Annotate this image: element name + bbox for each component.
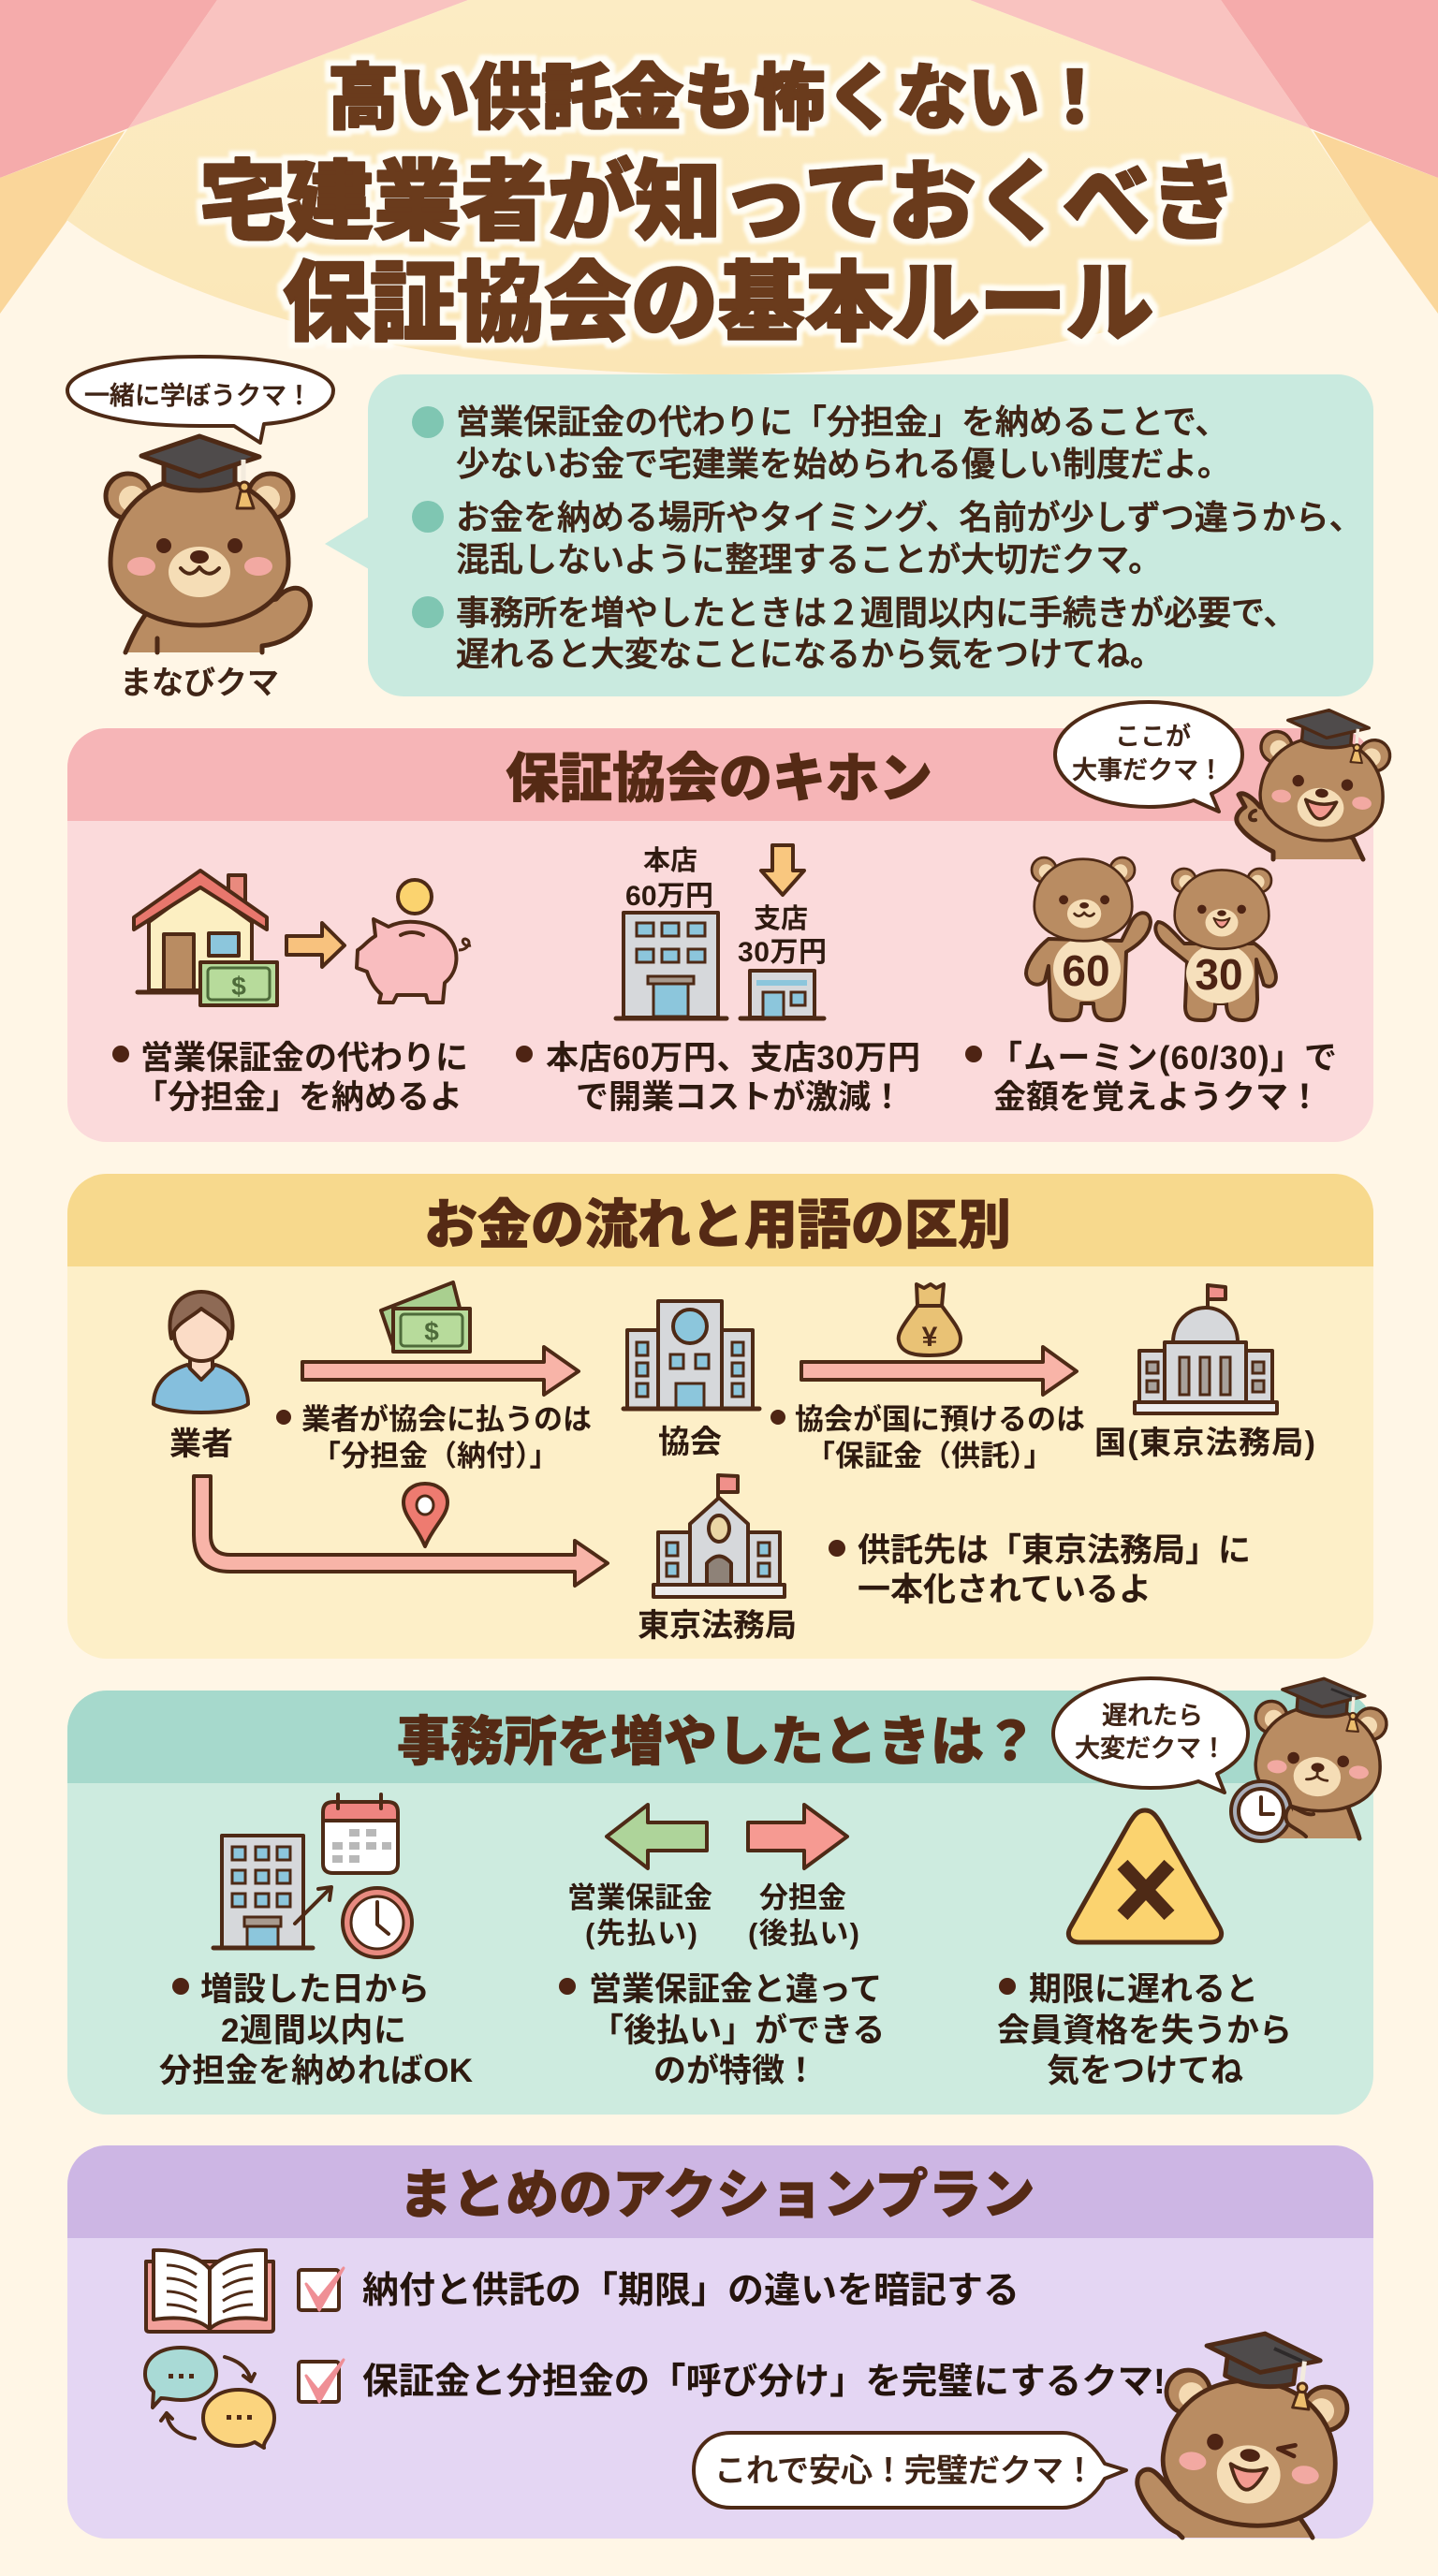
mascot: bear with clock [1231, 1674, 1389, 1841]
check item 2: 保証金と分担金の「呼び分け」を完璧にするクマ! [362, 2362, 1166, 2402]
icon: warning triangle [1068, 1810, 1222, 1942]
speech bubble: 一緒に学ぼうクマ: 一緒に学ぼうクマ！ [84, 382, 312, 410]
panel: 事務所を増やしたときは？ [67, 1690, 1373, 2115]
caption: 保証金 [770, 1403, 1085, 1472]
caption: 分担金 [276, 1403, 592, 1472]
caption 1: 増設した日から [200, 1971, 430, 2008]
mascot: pointing bear [1237, 705, 1393, 859]
arrow: operator to association [302, 1347, 579, 1395]
icon: building, calendar and clock [213, 1794, 412, 1957]
arrow: association to state [801, 1347, 1077, 1395]
panel: まとめのアクションプラン [67, 2145, 1373, 2539]
caption 2: 営業保証金と違って [589, 1971, 882, 2008]
icon: location pin [404, 1484, 448, 1546]
caption 3: 気をつけてね [1047, 2053, 1243, 2089]
label: 本店: 本店 [643, 845, 697, 876]
arrow labels: 営業保証金 [567, 1881, 712, 1914]
icon: main store and branch [616, 845, 827, 1018]
speech bubble: これで安心 [694, 2433, 1126, 2508]
icon: left and right arrows [607, 1805, 847, 1868]
icon: cash [381, 1282, 470, 1352]
icon: bear 60 [1026, 857, 1151, 1020]
panel: お金の流れと用語の区別 [67, 1174, 1373, 1659]
icon: house and money to piggy bank [134, 871, 471, 1005]
icon: cash: $ [424, 1317, 439, 1346]
icon: yen money bag [899, 1284, 961, 1355]
label: 本店: 60万円 [625, 881, 713, 912]
heading: お金の流れと用語の区別 [424, 1195, 1011, 1255]
mascot: まなびクマ [106, 436, 310, 652]
caption 1 [112, 1040, 468, 1116]
speech bubble: 遅れたら大変だクマ [1053, 1678, 1248, 1793]
arrow up [295, 1887, 331, 1924]
speech bubble: ここが大事だクマ: 大事だクマ！ [1072, 756, 1224, 784]
icon: bear 30: 30 [1195, 950, 1243, 999]
caption 2 [516, 1040, 920, 1116]
caption 3: 会員資格を失うから [997, 2012, 1292, 2049]
speech bubble: 遅れたら大変だクマ: 大変だクマ！ [1075, 1734, 1226, 1763]
arrow labels: (先払い) [585, 1917, 697, 1950]
icon: piggy bank [357, 880, 471, 1003]
label: 東京法務局: 東京法務局 [638, 1608, 797, 1644]
panel: intro key points [325, 374, 1373, 696]
icon: yen money bag: ¥ [922, 1322, 938, 1353]
arrow: bent to Tokyo Legal Affairs Bureau [194, 1476, 608, 1586]
mascot name: まなびクマ [120, 666, 279, 701]
icon: association building [624, 1301, 759, 1409]
caption 1: 営業保証金の代わりに [140, 1040, 468, 1076]
intro text: 混乱しないように整理することが大切だクマ。 [456, 540, 1162, 578]
label: 支店: 30万円 [738, 937, 827, 968]
intro text: 遅れると大変なことになるから気をつけてね。 [456, 635, 1164, 673]
heading: 保証協会のキホン [506, 749, 932, 809]
building [213, 1836, 313, 1948]
caption: 分担金: 「分担金（納付）」 [312, 1440, 558, 1472]
heading: 事務所を増やしたときは？ [397, 1712, 1037, 1772]
caption 1 [159, 1971, 473, 2089]
title: 高い供託金も怖くない！ [328, 59, 1110, 139]
mascot: waving bear with cap [1137, 2322, 1355, 2538]
background: top fan decoration [0, 0, 1438, 374]
arrow labels [567, 1881, 859, 1950]
icon: bear 30 [1155, 869, 1276, 1020]
check item 1: 納付と供託の「期限」の違いを暗記する [362, 2271, 1020, 2311]
caption 1: 2週間以内に [221, 2012, 406, 2049]
speech bubble: 遅れたら大変だクマ: 遅れたら [1102, 1702, 1203, 1730]
intro text [456, 402, 1363, 673]
speech bubble: これで安心: これで安心！完璧だクマ！ [714, 2453, 1095, 2489]
speech bubble: ここが大事だクマ [1055, 702, 1242, 812]
icon: Tokyo Legal Affairs Bureau building [653, 1475, 785, 1597]
heading: まとめのアクションプラン [399, 2165, 1034, 2225]
arrow down [761, 845, 804, 895]
title [199, 59, 1237, 352]
caption 2: 「後払い」ができる [591, 2012, 885, 2049]
label: 支店: 支店 [754, 903, 808, 934]
panel: 保証協会のキホン [67, 728, 1373, 1142]
clock [343, 1888, 412, 1957]
icon: operator person [154, 1292, 248, 1412]
caption: deposit destination: 一本化されているよ [858, 1572, 1152, 1608]
caption: deposit destination: 供託先は「東京法務局」に [858, 1532, 1251, 1569]
intro text: お金を納める場所やタイミング、名前が少しずつ違うから、 [456, 498, 1363, 536]
speech bubble: 一緒に学ぼうクマ [67, 357, 333, 443]
arrow [286, 923, 345, 967]
icon: open book [146, 2250, 273, 2332]
building: main store [616, 913, 726, 1018]
label: 国(東京法務局): 国(東京法務局) [1094, 1426, 1315, 1461]
icon: house [134, 871, 277, 1005]
caption: deposit destination [829, 1532, 1251, 1608]
label: 業者: 業者 [169, 1427, 233, 1462]
caption 1: 分担金を納めればOK [159, 2053, 473, 2089]
caption: 保証金: 協会が国に預けるのは [795, 1403, 1085, 1436]
speech bubble: ここが大事だクマ: ここが [1115, 723, 1191, 751]
building: branch [741, 971, 824, 1018]
label: 協会: 協会 [658, 1425, 722, 1460]
label: 本店 [625, 845, 713, 912]
icon: government building [1135, 1285, 1277, 1413]
intro text: 事務所を増やしたときは２週間以内に手続きが必要で、 [456, 593, 1298, 632]
title: 宅建業者が知っておくべき [199, 154, 1237, 251]
caption 2: のが特徴！ [653, 2053, 817, 2089]
caption: 保証金: 「保証金（供託）」 [806, 1440, 1052, 1472]
caption 2: で開業コストが激減！ [576, 1079, 903, 1116]
arrow labels: (後払い) [748, 1917, 859, 1950]
caption: 分担金: 業者が協会に払うのは [301, 1403, 592, 1436]
intro text: 営業保証金の代わりに「分担金」を納めることで、 [456, 402, 1228, 441]
caption 3 [965, 1040, 1337, 1116]
caption 3: 「ムーミン(60/30)」で [990, 1040, 1337, 1076]
caption 3 [997, 1971, 1292, 2089]
caption 3: 金額を覚えようクマ！ [993, 1079, 1321, 1116]
caption 2 [559, 1971, 885, 2089]
clock held by bear [1231, 1781, 1291, 1841]
title: 保証協会の基本ルール [283, 255, 1153, 352]
icon: bear 60: 60 [1062, 946, 1110, 995]
label: 支店 [738, 903, 827, 968]
caption 2: 本店60万円、支店30万円 [546, 1040, 920, 1076]
icon: house: $ [231, 972, 246, 1001]
icon: speech bubbles [145, 2348, 274, 2448]
bullet points [412, 406, 444, 628]
caption 1: 「分担金」を納めるよ [135, 1079, 462, 1116]
caption 3: 期限に遅れると [1029, 1971, 1258, 2008]
arrow labels: 分担金 [759, 1881, 846, 1914]
intro text: 少ないお金で宅建業を始められる優しい制度だよ。 [456, 445, 1231, 483]
calendar [323, 1794, 398, 1873]
